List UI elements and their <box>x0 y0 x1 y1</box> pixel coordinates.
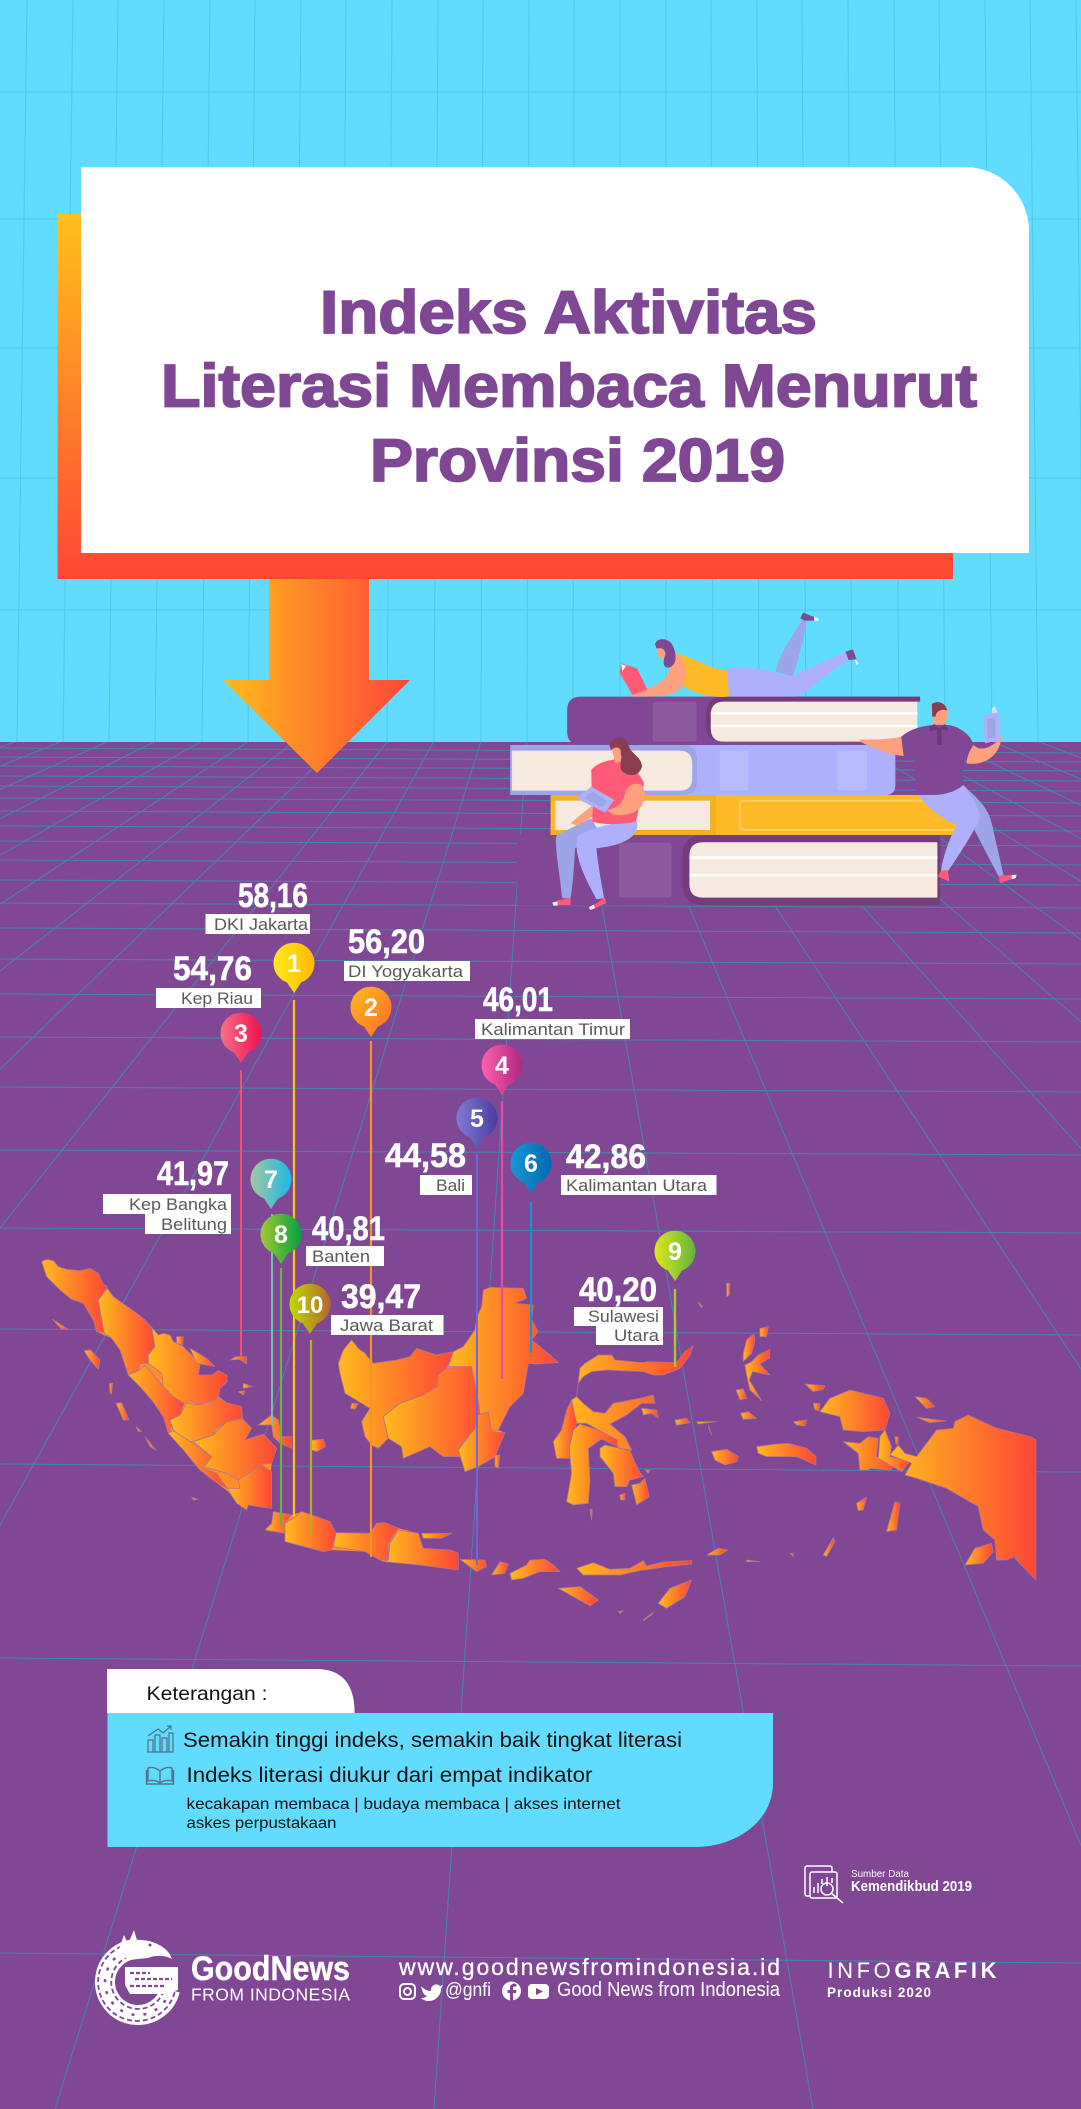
pin 4: Kalimantan Timur: Kalimantan Timur <box>481 1020 625 1039</box>
pin 10: Jawa Barat: 39,47 <box>341 1278 421 1316</box>
pin 4: Kalimantan Timur: 4 <box>495 1052 509 1080</box>
pin 1: DKI Jakarta <box>206 877 314 1517</box>
icon: bar chart <box>147 1726 173 1752</box>
book: yellow <box>551 795 960 835</box>
icon: open book <box>146 1767 174 1784</box>
down arrow <box>223 579 410 773</box>
pin 9: Sulawesi Utara: 9 <box>668 1238 682 1266</box>
pin 8: Banten <box>260 1210 385 1526</box>
title: Literasi Membaca Menurut <box>161 352 977 420</box>
website and social media: @gnfi <box>445 1980 491 2001</box>
icon: facebook <box>502 1982 521 2001</box>
pin 2: DI Yogyakarta <box>344 923 470 1557</box>
title card <box>81 167 1029 553</box>
legend text 2: Indeks literasi diukur dari empat indikator <box>186 1764 593 1787</box>
book: bottom purple <box>517 835 940 906</box>
map of Indonesia <box>42 1259 1036 1621</box>
pin 6: Kalimantan Utara: Kalimantan Utara <box>566 1176 708 1195</box>
background floor with perspective grid <box>0 741 1081 2109</box>
infografik label: Produksi 2020 <box>827 1985 931 2000</box>
pin 5: Bali: 5 <box>470 1105 484 1133</box>
pin 8: Banten: Banten <box>312 1247 370 1266</box>
infografik label: INFOGRAFIK <box>828 1958 997 1983</box>
pin 7: Kep Bangka Belitung: 7 <box>264 1166 278 1194</box>
legend tab: Keterangan : <box>146 1683 268 1705</box>
pin 7: Kep Bangka Belitung <box>103 1155 292 1425</box>
pin 7: Kep Bangka Belitung: Kep Bangka <box>129 1195 228 1214</box>
website and social media: Good News from Indonesia <box>557 1979 781 2001</box>
pin 9: Sulawesi Utara: Utara <box>614 1326 660 1345</box>
pin 1: DKI Jakarta: DKI Jakarta <box>214 915 309 934</box>
legend text 3 <box>186 1796 621 1832</box>
pin 1: DKI Jakarta: 58,16 <box>238 877 308 915</box>
icon: youtube <box>528 1984 549 1999</box>
pin 6: Kalimantan Utara: 42,86 <box>566 1138 646 1176</box>
pin 2: DI Yogyakarta: 2 <box>364 994 378 1022</box>
map: Sulawesi <box>553 1283 730 1520</box>
person: woman lying on books <box>620 613 859 697</box>
map: Maluku <box>675 1327 900 1562</box>
pin 2: DI Yogyakarta: 56,20 <box>348 923 425 961</box>
title backing panel <box>58 214 953 579</box>
infografik label <box>827 1958 997 2000</box>
pin 3: Kep Riau <box>156 950 262 1357</box>
pin 7: Kep Bangka Belitung: 41,97 <box>157 1155 229 1193</box>
map: Kalimantan <box>338 1287 558 1472</box>
icon: data source <box>805 1866 843 1903</box>
source credit <box>805 1866 972 1903</box>
map: Papua <box>813 1390 1036 1580</box>
pin 5: Bali <box>385 1098 498 1565</box>
source credit: Sumber Data <box>851 1868 909 1880</box>
logo mark <box>98 1930 178 2021</box>
illustration: stacked books and readers <box>510 613 1017 910</box>
pin 10: Jawa Barat: 10 <box>297 1292 323 1319</box>
logo: GoodNews from Indonesia: FROM INDONESIA <box>191 1984 350 2004</box>
source credit: Kemendikbud 2019 <box>851 1879 972 1895</box>
pin 4: Kalimantan Timur: 46,01 <box>483 981 553 1019</box>
website and social media: www.goodnewsfromindonesia.id <box>398 1954 780 1980</box>
pin 10: Jawa Barat <box>290 1278 444 1535</box>
pin 9: Sulawesi Utara: 40,20 <box>579 1271 657 1309</box>
website and social media <box>398 1954 781 2001</box>
pin 8: Banten: 40,81 <box>312 1210 385 1248</box>
map: Sumatra <box>42 1259 326 1510</box>
background sky <box>0 0 1081 743</box>
pin 2: DI Yogyakarta: DI Yogyakarta <box>348 962 464 981</box>
pin 1: DKI Jakarta: 1 <box>287 950 301 978</box>
legend text 1: Semakin tinggi indeks, semakin baik tingkat literasi <box>183 1729 682 1752</box>
pin 5: Bali: 44,58 <box>385 1137 466 1175</box>
logo: GoodNews from Indonesia: GoodNews <box>191 1950 350 1988</box>
pin 4: Kalimantan Timur <box>475 981 630 1379</box>
pin 5: Bali: Bali <box>436 1176 465 1195</box>
pin 6: Kalimantan Utara: 6 <box>524 1150 538 1178</box>
icon: instagram <box>400 1984 415 1999</box>
pin 3: Kep Riau: 3 <box>234 1020 248 1048</box>
legend text 3: askes perpustakaan <box>186 1815 336 1832</box>
title: Provinsi 2019 <box>370 427 785 494</box>
pin 9: Sulawesi Utara <box>574 1231 696 1367</box>
legend text 3: kecakapan membaca | budaya membaca | akses internet <box>186 1796 621 1813</box>
person: standing man <box>860 702 1017 883</box>
logo: GoodNews from Indonesia <box>98 1930 350 2021</box>
pin 8: Banten: 8 <box>274 1221 288 1249</box>
book: top purple <box>567 697 920 745</box>
pin 3: Kep Riau: 54,76 <box>173 950 252 988</box>
legend body <box>108 1713 773 1847</box>
pin 3: Kep Riau: Kep Riau <box>181 989 253 1008</box>
map: Java, Bali and Nusa Tenggara <box>265 1512 692 1621</box>
title <box>161 279 977 494</box>
pin 9: Sulawesi Utara: Sulawesi <box>588 1307 659 1326</box>
pin 6: Kalimantan Utara <box>510 1138 716 1353</box>
legend tab <box>107 1669 355 1713</box>
pin 10: Jawa Barat: Jawa Barat <box>340 1316 433 1335</box>
title: Indeks Aktivitas <box>320 279 817 346</box>
icon: twitter <box>421 1984 443 2001</box>
book: periwinkle <box>510 745 895 795</box>
pin 7: Kep Bangka Belitung: Belitung <box>161 1215 227 1234</box>
person: seated woman <box>552 738 645 910</box>
legend panel <box>107 1669 773 1847</box>
